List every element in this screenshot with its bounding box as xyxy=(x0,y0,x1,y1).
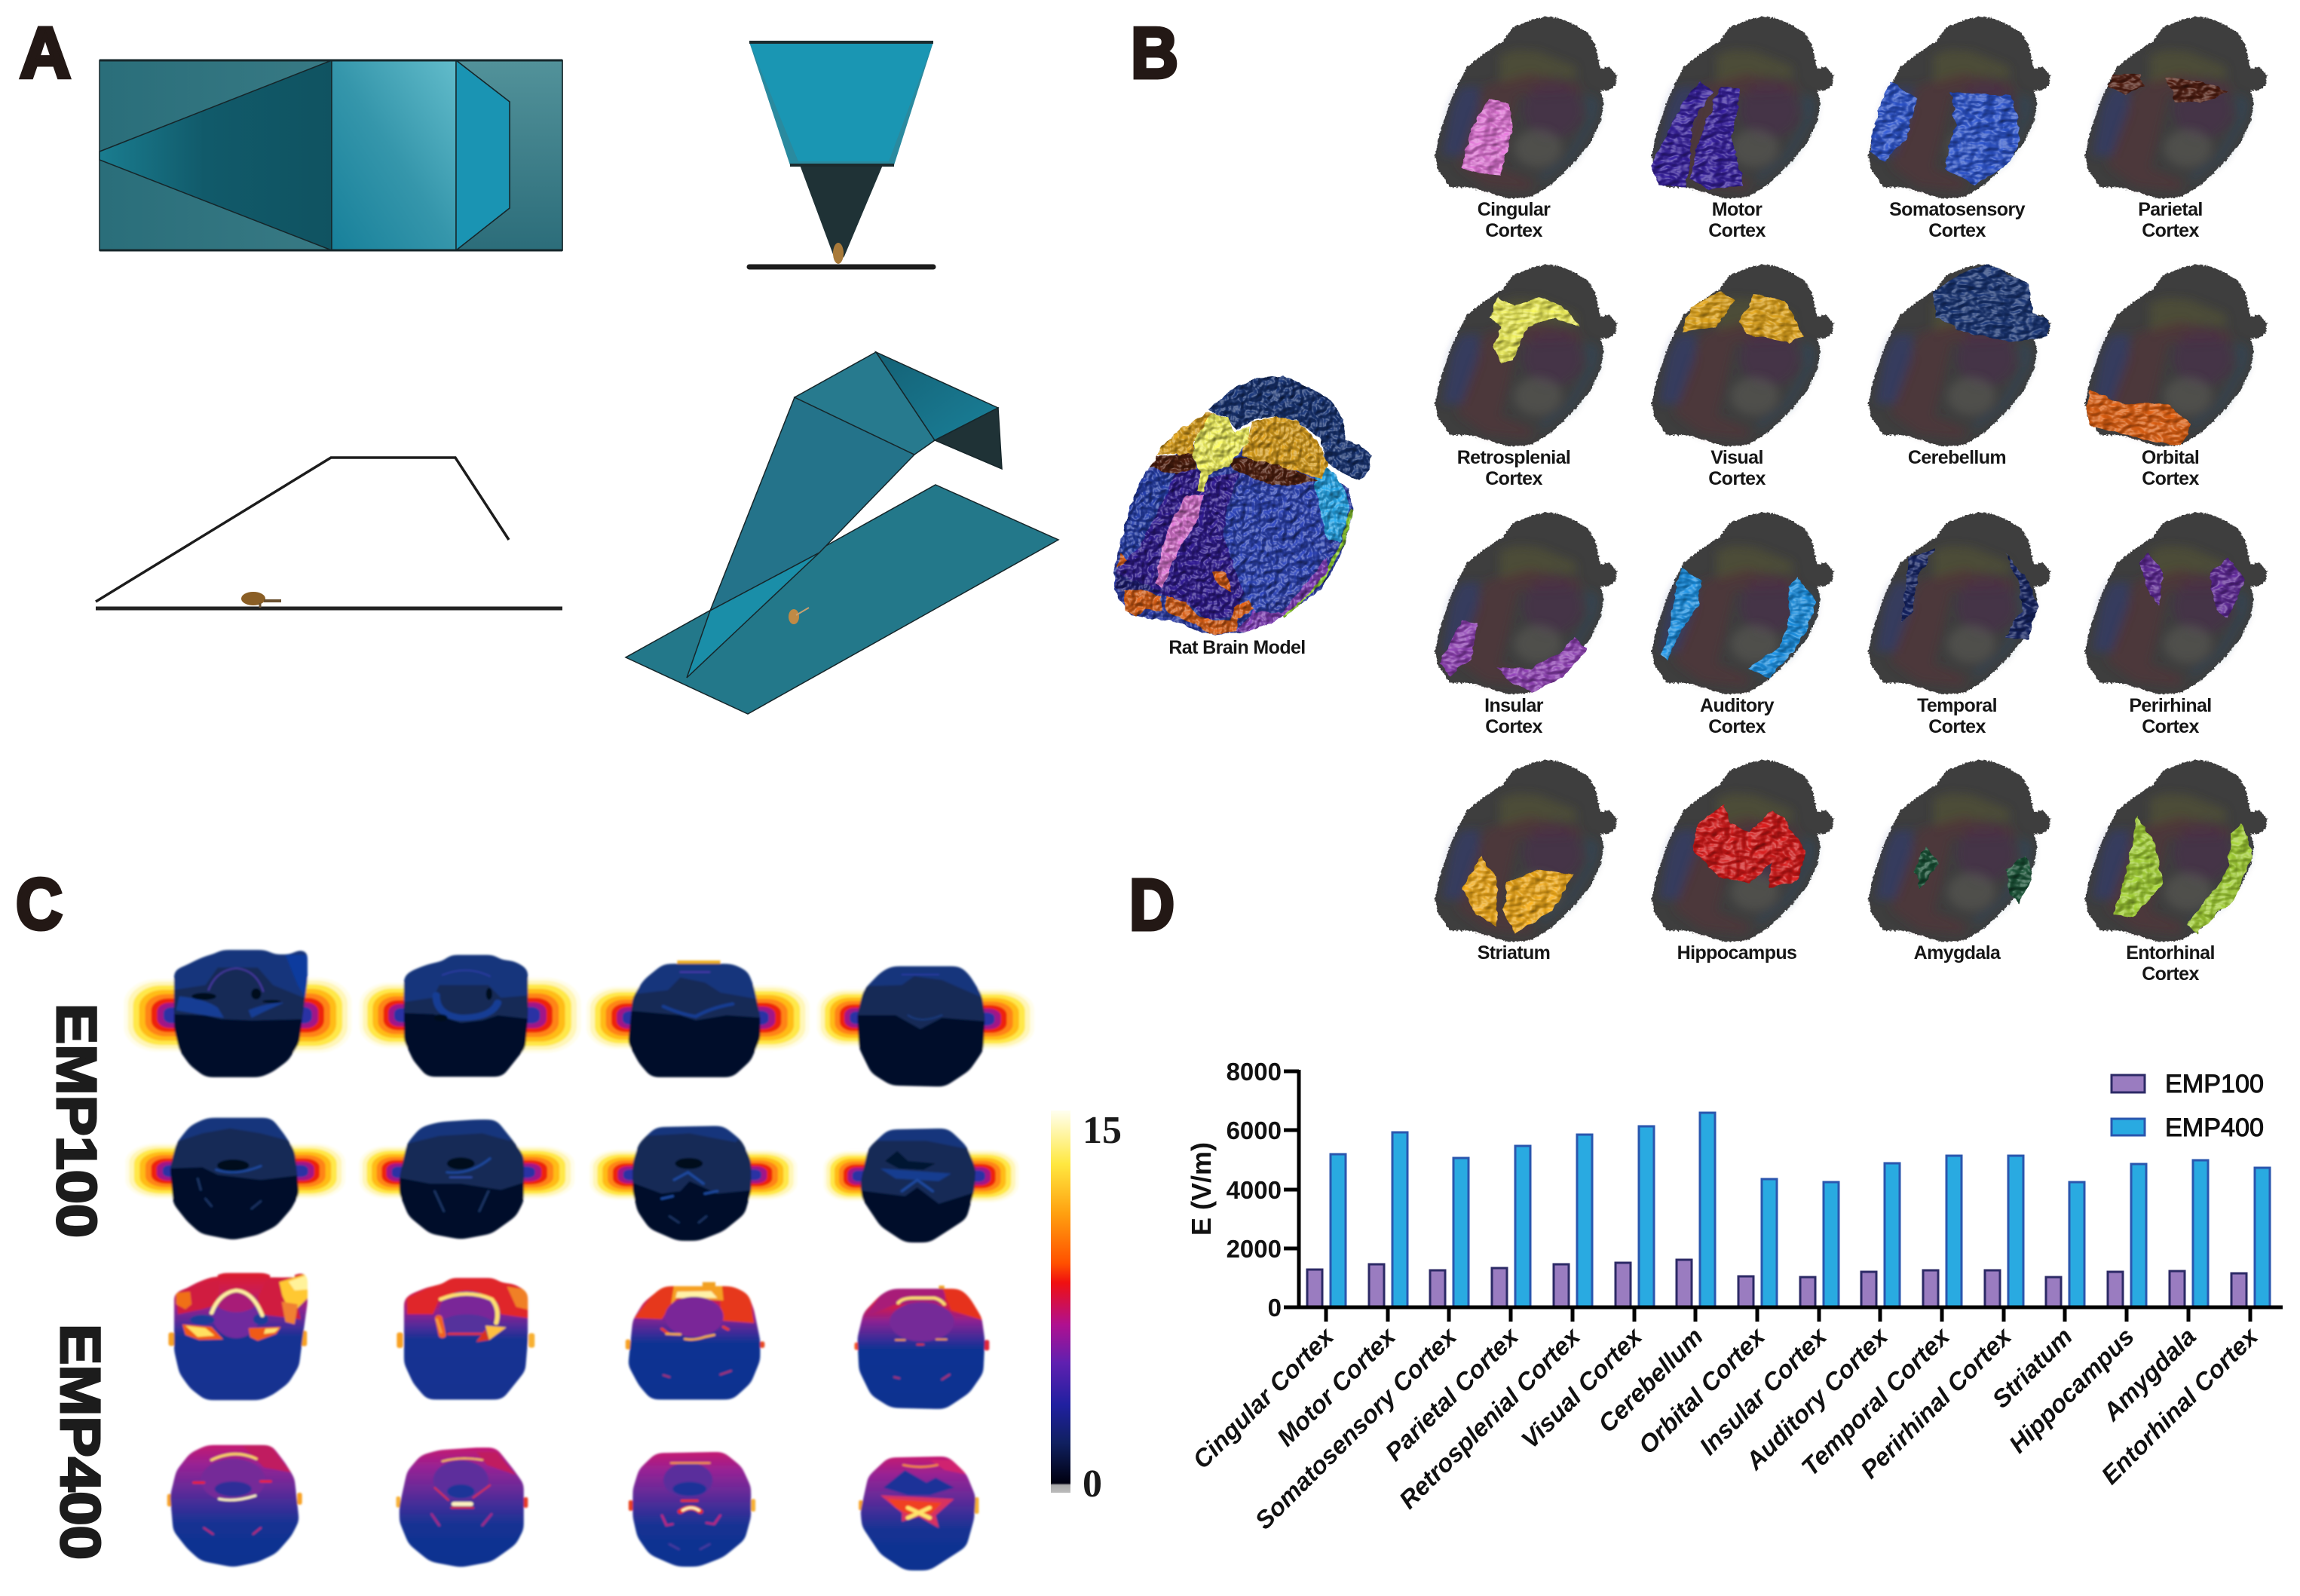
panel B: cerebellum brain xyxy=(1868,264,2050,446)
label: orbital cortex: Cortex xyxy=(2142,468,2199,489)
x axis category labels: Orbital Cortex xyxy=(1633,1322,1771,1460)
x axis category labels: Cingular Cortex xyxy=(1187,1322,1340,1474)
panel letter B: B xyxy=(1131,13,1178,93)
panel B: amygdala brain xyxy=(1868,760,2050,942)
panel D: bar chart xyxy=(1186,1058,2283,1534)
x axis category labels: Somatosensory Cortex xyxy=(1249,1322,1462,1534)
label: perirhinal cortex: Cortex xyxy=(2142,716,2199,737)
label: cerebellum: Cerebellum xyxy=(1908,447,2006,468)
label: entorhinal cortex: Cortex xyxy=(2142,963,2199,985)
label: parietal cortex: Cortex xyxy=(2142,220,2199,241)
y axis tick labels: 8000 xyxy=(1227,1058,1282,1086)
colour bar label: 15: 15 xyxy=(1083,1109,1122,1152)
panel B: retrosplenial cortex brain xyxy=(1435,264,1617,446)
label: retrosplenial cortex: Retrosplenial xyxy=(1457,447,1570,468)
EMP100 row 2 slice 4 xyxy=(823,1126,1018,1242)
EMP100 row 1 slice 1 xyxy=(124,948,351,1077)
EMP100 row 2 slice 1 xyxy=(125,1116,345,1240)
x axis category labels: Temporal Cortex xyxy=(1796,1322,1955,1481)
colour bar xyxy=(1051,1110,1070,1493)
EMP100 row 1 slice 2 xyxy=(360,952,580,1077)
EMP400 row 2 slice 1 xyxy=(167,1445,302,1567)
label: motor cortex: Motor xyxy=(1712,199,1763,220)
icon: rat on floor xyxy=(789,608,809,624)
label: somatosensory cortex: Somatosensory xyxy=(1889,199,2026,220)
label: insular cortex: Cortex xyxy=(1485,716,1542,737)
x axis category labels: Auditory Cortex xyxy=(1740,1322,1894,1475)
panel letter C: C xyxy=(16,864,63,945)
y axis tick labels xyxy=(1227,1058,1282,1322)
label: amygdala: Amygdala xyxy=(1914,942,2001,963)
panel B: somatosensory cortex brain xyxy=(1868,17,2050,198)
label: EMP400: EMP400 xyxy=(49,1324,112,1560)
EMP400 row 2 slice 3 xyxy=(629,1452,755,1567)
icon: rat front xyxy=(833,243,844,264)
x axis category labels: Cerebellum xyxy=(1593,1322,1708,1438)
EMP400 bars xyxy=(1331,1113,2270,1307)
label: insular cortex: Insular xyxy=(1484,695,1544,716)
x axis category labels: Visual Cortex xyxy=(1516,1322,1648,1454)
label: motor cortex: Cortex xyxy=(1708,220,1766,241)
label: parietal cortex: Parietal xyxy=(2138,199,2203,220)
icon: rat side xyxy=(241,592,281,608)
panel C: EMP400 heat maps xyxy=(167,1273,989,1570)
panel B: motor cortex brain xyxy=(1651,17,1833,198)
legend xyxy=(2112,1070,2264,1142)
label: orbital cortex: Orbital xyxy=(2142,447,2199,468)
x axis category labels: Amygdala xyxy=(2097,1322,2201,1426)
panel B: auditory cortex brain xyxy=(1652,512,1833,694)
label: visual cortex: Visual xyxy=(1710,447,1763,468)
x axis category labels: Striatum xyxy=(1986,1322,2078,1414)
panel B: rat brain model composite xyxy=(1113,375,1371,635)
panel B: entorhinal cortex brain xyxy=(2085,760,2267,942)
label: rat brain model: Rat Brain Model xyxy=(1168,637,1306,658)
x axis category labels: Perirhinal Cortex xyxy=(1855,1322,2017,1484)
EMP400 row 2 slice 2 xyxy=(397,1447,528,1567)
EMP400 row 1 slice 1 xyxy=(168,1273,310,1400)
panel C: EMP100 heat maps xyxy=(124,948,1034,1242)
y axis tick labels: 0 xyxy=(1268,1294,1282,1322)
EMP100 bars xyxy=(1307,1260,2246,1307)
label: visual cortex: Cortex xyxy=(1708,468,1766,489)
EMP400 row 1 slice 4 xyxy=(855,1285,989,1409)
x axis category labels: Hippocampus xyxy=(2003,1322,2139,1458)
panel letter D: D xyxy=(1129,865,1175,945)
EMP100 row 1 slice 3 xyxy=(586,957,810,1077)
label: EMP100: EMP100 xyxy=(45,1003,108,1238)
label: cingular cortex: Cortex xyxy=(1485,220,1542,241)
colour bar label: 0: 0 xyxy=(1083,1463,1102,1506)
panel B: parietal cortex brain xyxy=(2085,17,2267,198)
panel A: side view of chamber xyxy=(96,458,562,608)
panel A: top view of chamber xyxy=(100,60,562,250)
y axis tick labels: 6000 xyxy=(1227,1117,1282,1144)
panel B: orbital cortex brain xyxy=(2085,264,2267,446)
x axis category labels: Motor Cortex xyxy=(1272,1322,1401,1451)
label: somatosensory cortex: Cortex xyxy=(1928,220,1986,241)
panel A: perspective view of chamber xyxy=(626,352,1058,714)
label: temporal cortex: Temporal xyxy=(1917,695,1997,716)
panel B: striatum brain xyxy=(1435,760,1617,942)
x axis category labels xyxy=(1187,1322,2264,1534)
axes and ticks xyxy=(1284,1070,2283,1322)
panel B: perirhinal cortex brain xyxy=(2085,512,2267,694)
label: striatum: Striatum xyxy=(1478,942,1550,963)
EMP400 row 1 slice 2 xyxy=(397,1278,534,1400)
legend: EMP100 xyxy=(2165,1070,2264,1098)
EMP100 row 2 slice 3 xyxy=(590,1123,798,1241)
label: perirhinal cortex: Perirhinal xyxy=(2129,695,2212,716)
x axis category labels: Parietal Cortex xyxy=(1380,1322,1524,1466)
EMP100 row 1 slice 4 xyxy=(817,963,1034,1087)
y axis tick labels: 4000 xyxy=(1227,1176,1282,1204)
panel B: insular cortex brain xyxy=(1435,512,1617,694)
panel B: temporal cortex brain xyxy=(1868,512,2050,694)
y axis title: E (V/m) xyxy=(1186,1142,1217,1236)
panel B: cingular cortex brain xyxy=(1435,17,1617,198)
EMP400 row 1 slice 3 xyxy=(626,1282,764,1400)
panel A: front view of chamber xyxy=(749,42,933,267)
panel B: visual cortex brain xyxy=(1652,264,1833,446)
panel B: hippocampus brain xyxy=(1652,760,1833,942)
label: auditory cortex: Cortex xyxy=(1708,716,1766,737)
EMP100 row 2 slice 2 xyxy=(360,1118,574,1239)
EMP400 row 2 slice 4 xyxy=(859,1457,978,1570)
label: hippocampus: Hippocampus xyxy=(1677,942,1796,963)
y axis tick labels: 2000 xyxy=(1227,1235,1282,1263)
panel letter A: A xyxy=(20,13,71,93)
label: entorhinal cortex: Entorhinal xyxy=(2126,942,2215,963)
x axis category labels: Insular Cortex xyxy=(1694,1322,1833,1460)
label: auditory cortex: Auditory xyxy=(1700,695,1775,716)
x axis category labels: Retrosplenial Cortex xyxy=(1394,1322,1586,1514)
legend: EMP400 xyxy=(2165,1114,2264,1142)
label: cingular cortex: Cingular xyxy=(1478,199,1551,220)
label: temporal cortex: Cortex xyxy=(1928,716,1986,737)
x axis category labels: Entorhinal Cortex xyxy=(2096,1322,2264,1490)
label: retrosplenial cortex: Cortex xyxy=(1485,468,1542,489)
